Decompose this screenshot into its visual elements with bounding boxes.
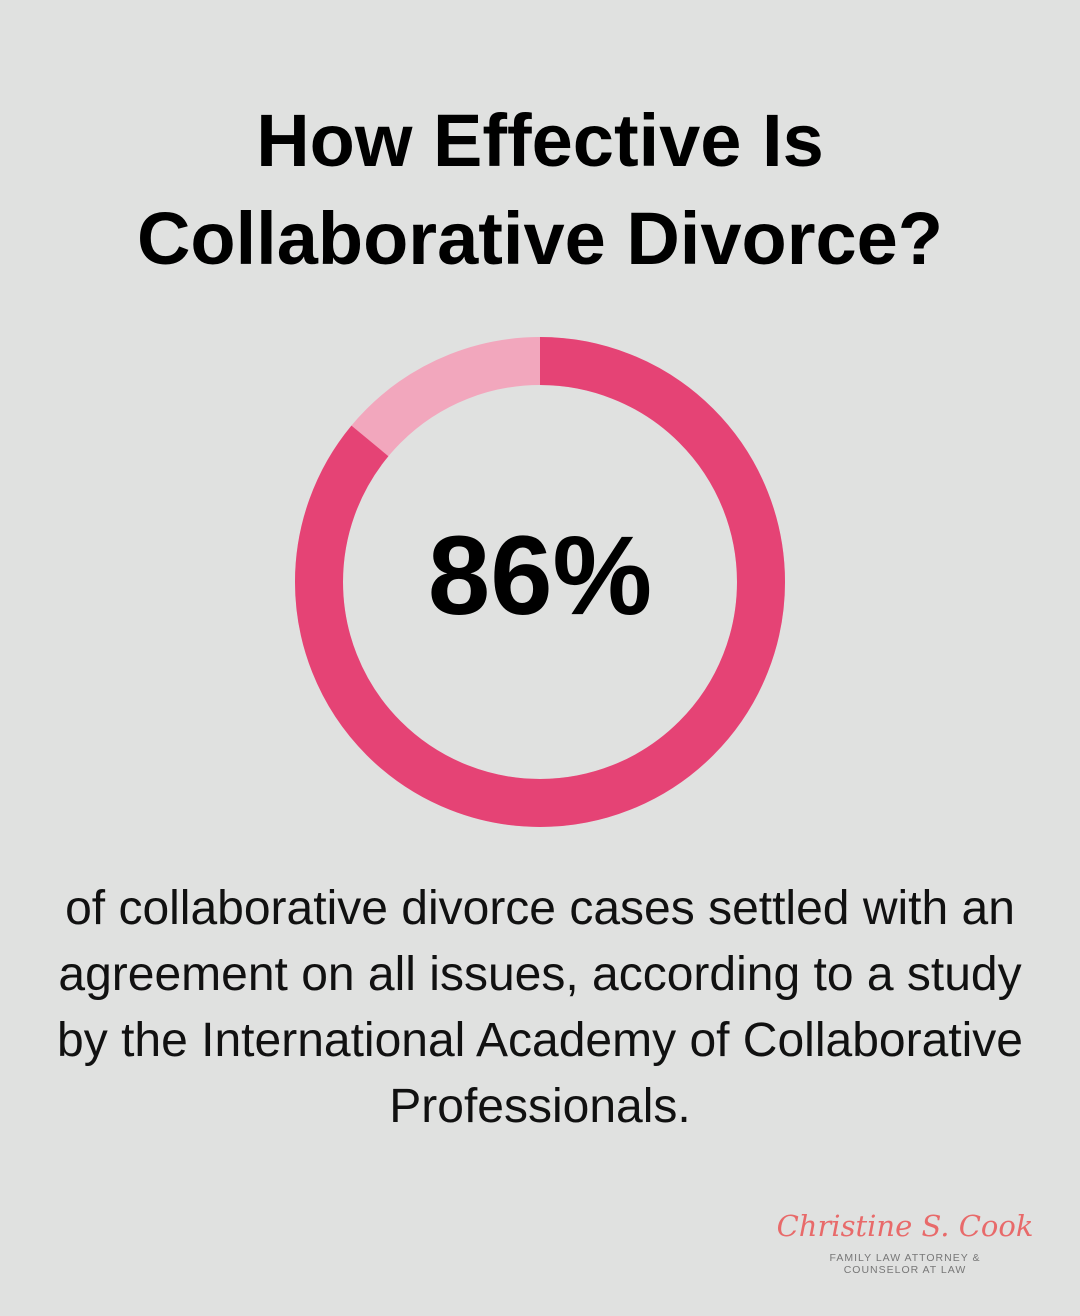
description text: by the International Academy of Collaborative (57, 1014, 1023, 1067)
logo: Christine S. Cook (777, 1209, 1033, 1243)
title: Collaborative Divorce? (137, 197, 943, 280)
donut chart: 86% (428, 513, 652, 638)
description text: agreement on all issues, according to a study (58, 948, 1022, 1001)
description text: Professionals. (389, 1080, 691, 1133)
logo: FAMILY LAW ATTORNEY & (830, 1252, 980, 1264)
description text: of collaborative divorce cases settled with an (65, 882, 1015, 935)
title: How Effective Is (256, 99, 824, 182)
logo (777, 1209, 1033, 1276)
title (137, 99, 943, 280)
logo: COUNSELOR AT LAW (844, 1264, 966, 1276)
description text (57, 882, 1023, 1133)
